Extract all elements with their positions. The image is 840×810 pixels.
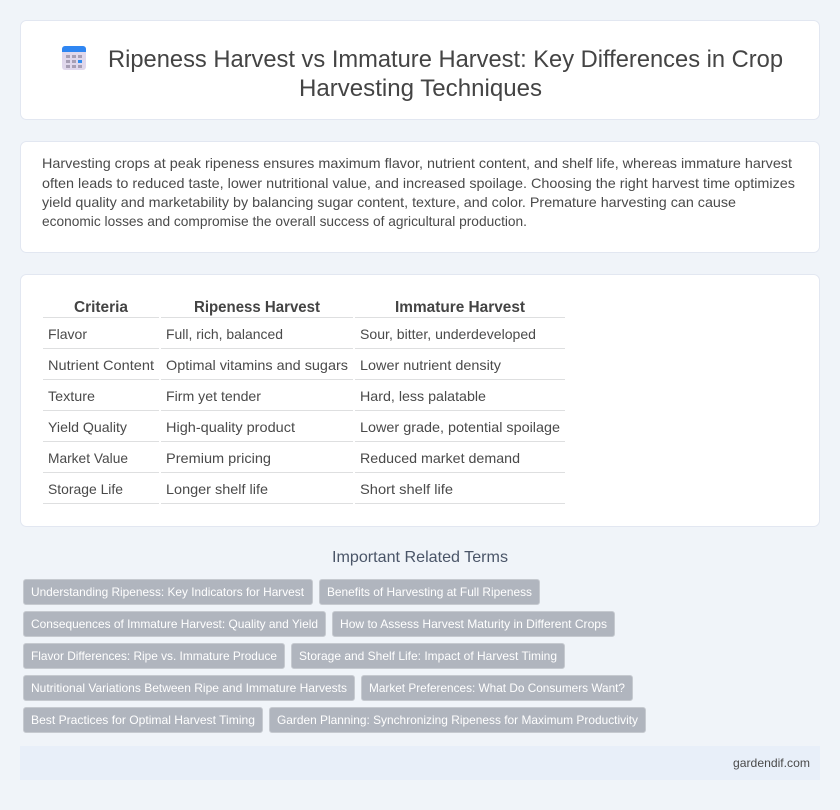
table row: market value	[48, 450, 520, 466]
tag	[24, 644, 284, 668]
table row: flavor: Sour, bitter, underdeveloped	[360, 326, 536, 342]
related terms tags	[24, 580, 646, 732]
title: Harvesting Techniques	[299, 75, 542, 102]
tag: Benefits of Harvesting at Full Ripeness	[327, 585, 532, 599]
tag	[320, 580, 540, 604]
intro paragraph	[42, 155, 795, 229]
icon: calendar	[62, 46, 86, 70]
table row: texture: Firm yet tender	[166, 388, 261, 404]
table row: market value: Reduced market demand	[360, 450, 520, 466]
table row: flavor: Flavor	[48, 326, 87, 342]
table row: nutrient content: Lower nutrient density	[360, 357, 501, 373]
tag: Garden Planning: Synchronizing Ripeness for Maximum Productivity	[277, 713, 638, 727]
table header	[74, 299, 526, 316]
tag	[332, 612, 614, 636]
table header: Criteria	[74, 299, 128, 316]
intro paragraph: economic losses and compromise the overall success of agricultural production.	[42, 213, 527, 229]
title: Ripeness Harvest vs Immature Harvest: Key Differences in Crop	[108, 46, 783, 73]
tag: Best Practices for Optimal Harvest Timing	[31, 713, 255, 727]
tag: Storage and Shelf Life: Impact of Harvest Timing	[299, 649, 557, 663]
tag	[24, 580, 312, 604]
tag: Consequences of Immature Harvest: Quality and Yield	[31, 617, 318, 631]
table row: flavor: Full, rich, balanced	[166, 326, 283, 342]
table row: storage life	[48, 481, 453, 497]
tag: Market Preferences: What Do Consumers Want?	[369, 681, 625, 695]
tag: Flavor Differences: Ripe vs. Immature Produce	[31, 649, 277, 663]
table row: storage life: Storage Life	[48, 481, 123, 497]
table row: nutrient content: Nutrient Content	[48, 357, 154, 373]
tag	[24, 676, 354, 700]
tag: How to Assess Harvest Maturity in Different Crops	[340, 617, 607, 631]
table row: nutrient content: Optimal vitamins and sugars	[166, 357, 348, 373]
title	[108, 46, 783, 102]
table row: texture: Texture	[48, 388, 95, 404]
table row: storage life: Longer shelf life	[166, 481, 268, 497]
table row: market value: Premium pricing	[166, 450, 271, 466]
table row: texture: Hard, less palatable	[360, 388, 486, 404]
tag	[362, 676, 632, 700]
footer	[20, 746, 820, 780]
intro paragraph: yield quality and marketability by balancing sugar content, texture, and color. Premature harvesting can cause	[42, 194, 736, 210]
table header: Ripeness Harvest	[194, 299, 321, 316]
panel: comparison table	[20, 274, 820, 526]
heading: related terms: Important Related Terms	[332, 549, 508, 566]
table row: texture	[48, 388, 486, 404]
intro paragraph: often leads to reduced taste, lower nutritional value, and increased spoilage. Choosing the right harvest time optimizes	[42, 175, 795, 191]
table row: yield quality: Yield Quality	[48, 419, 127, 435]
tag	[270, 708, 646, 732]
tag	[24, 612, 326, 636]
footer: gardendif.com	[733, 756, 810, 770]
table row: yield quality	[48, 419, 560, 435]
table row: flavor	[48, 326, 536, 342]
panel: intro text	[20, 142, 820, 252]
table row: nutrient content	[48, 357, 501, 373]
table row: market value: Market Value	[48, 450, 128, 466]
tag: Nutritional Variations Between Ripe and Immature Harvests	[31, 681, 347, 695]
tag	[24, 708, 262, 732]
table header: Immature Harvest	[395, 299, 526, 316]
tag	[292, 644, 564, 668]
panel: title card	[20, 20, 820, 120]
table row: yield quality: High-quality product	[166, 419, 295, 435]
tag: Understanding Ripeness: Key Indicators for Harvest	[31, 585, 305, 599]
table row: yield quality: Lower grade, potential spoilage	[360, 419, 560, 435]
table row: storage life: Short shelf life	[360, 481, 453, 497]
intro paragraph: Harvesting crops at peak ripeness ensures maximum flavor, nutrient content, and shelf life, whereas immature harvest	[42, 155, 792, 171]
